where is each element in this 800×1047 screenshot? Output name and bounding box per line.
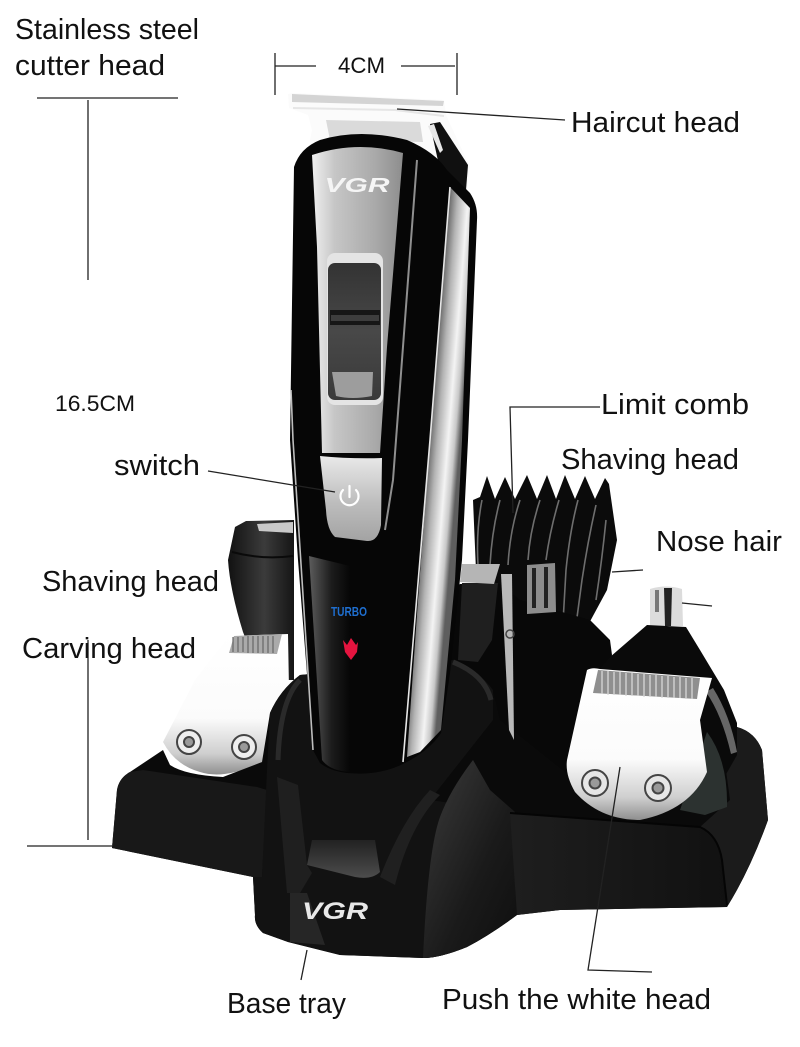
clipper body <box>290 134 477 774</box>
label: 16.5CM: 16.5CM <box>55 391 135 416</box>
screw <box>177 730 201 754</box>
collar ring <box>278 662 491 760</box>
right silver strip <box>407 187 470 757</box>
label: Stainless steel cutter head: Stainless steel <box>15 14 199 46</box>
logo: VGR base: VGR <box>302 898 369 925</box>
label: Limit comb: Limit comb <box>601 389 749 421</box>
icon: power switch <box>341 486 359 505</box>
right tray <box>510 813 727 915</box>
lower face highlight <box>309 556 350 772</box>
top haircut head <box>288 93 470 190</box>
front white blade <box>567 668 712 820</box>
label: Shaving head right: Shaving head <box>561 444 739 476</box>
power panel <box>320 456 382 541</box>
screw <box>232 735 256 759</box>
highlight panel <box>307 840 380 878</box>
clipper illustration <box>112 93 768 958</box>
label: 4CM: 4CM <box>338 53 385 78</box>
label: Stainless steel cutter head: cutter head <box>15 50 165 82</box>
pointer: haircut head <box>397 109 565 120</box>
logo: VGR: VGR <box>324 175 390 197</box>
pointer: push the white head <box>588 767 652 972</box>
middle trimmer blade and strip <box>460 564 514 740</box>
thin line highlight <box>385 160 417 530</box>
silver front panel <box>312 147 403 453</box>
label: Nose hair: Nose hair <box>656 526 782 558</box>
center column <box>253 660 517 958</box>
pointer: base tray <box>301 950 307 980</box>
left tray front <box>112 770 267 877</box>
middle trimmer head <box>430 563 612 820</box>
pointer: limit comb <box>510 407 600 513</box>
nose hair trimmer and front blade <box>567 586 737 820</box>
screw <box>582 770 608 796</box>
base tray <box>112 660 768 958</box>
label: Carving head: Carving head <box>22 633 196 665</box>
label: Push the white head: Push the white head <box>442 984 711 1016</box>
icon: red fox indicator <box>343 638 358 660</box>
label: Shaving head left: Shaving head <box>42 566 219 598</box>
label: switch: switch <box>114 450 200 482</box>
dimension: height 16.5CM <box>27 98 178 846</box>
dimension: width 4CM <box>275 53 457 95</box>
back left shaving head <box>228 520 294 680</box>
limit comb <box>473 475 617 665</box>
right lit panel <box>423 760 515 958</box>
TURBO indicator: TURBO <box>331 604 367 619</box>
pointer: nose hair <box>682 603 712 606</box>
label: Haircut head: Haircut head <box>571 107 740 139</box>
mode buttons <box>327 253 383 405</box>
label: Base tray: Base tray <box>227 988 346 1020</box>
pointer: switch <box>208 471 335 492</box>
pointer: shaving head right <box>612 570 643 572</box>
left edge highlight <box>291 390 313 750</box>
left carving head <box>163 634 290 774</box>
screw <box>645 775 671 801</box>
label: Stainless steel cutter head <box>15 14 199 82</box>
